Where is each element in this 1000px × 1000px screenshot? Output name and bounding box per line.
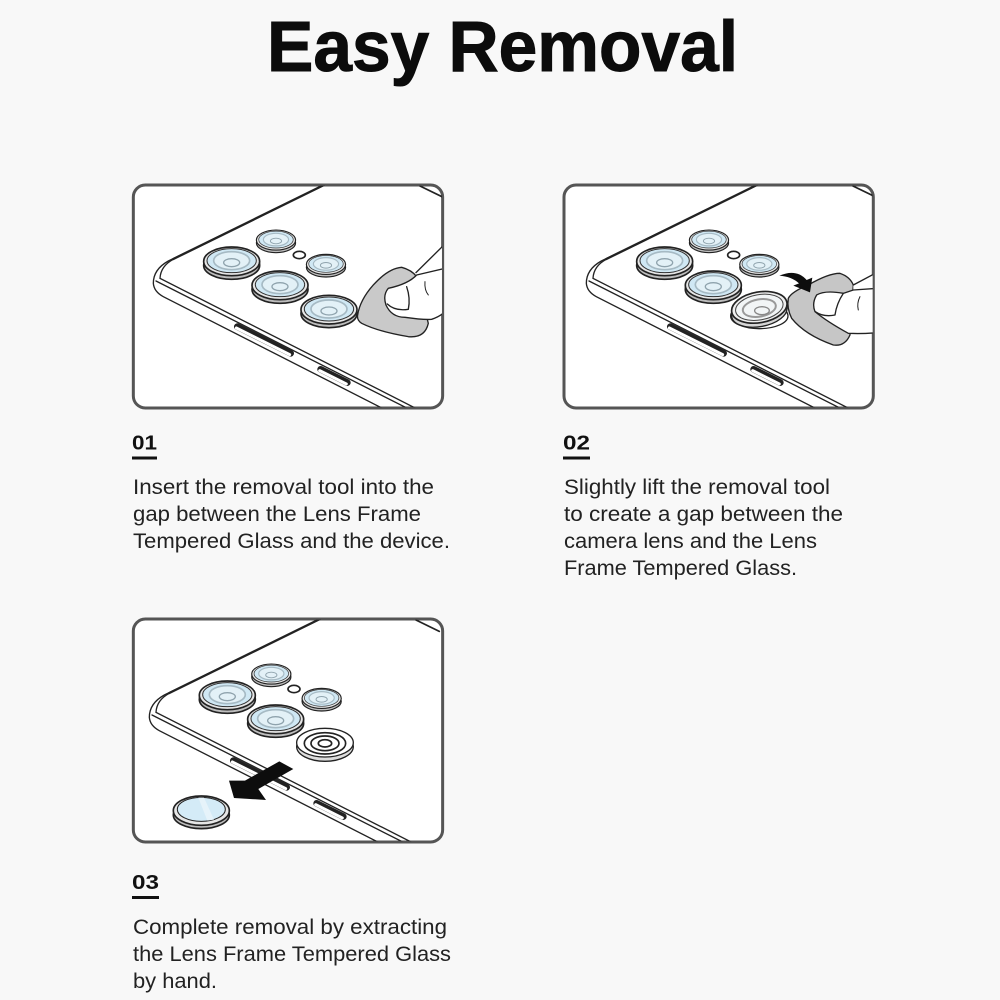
title: Easy Removal <box>267 8 738 87</box>
step 2 text <box>564 475 843 580</box>
step 2 text: to create a gap between the <box>564 502 843 526</box>
step 2 text: Frame Tempered Glass. <box>564 556 797 580</box>
panel: step 3 illustration <box>133 619 443 845</box>
step 3 number <box>132 872 159 899</box>
step 3 text <box>133 915 451 993</box>
step 3 number: 03 <box>132 872 159 894</box>
step 3 text: by hand. <box>133 969 217 993</box>
step 1 text: gap between the Lens Frame <box>133 502 421 526</box>
step 3 text: the Lens Frame Tempered Glass <box>133 942 451 966</box>
step 2 number <box>563 432 590 460</box>
step 1 text: Tempered Glass and the device. <box>133 529 450 553</box>
step 2 number: 02 <box>563 432 590 454</box>
panel: step 2 illustration <box>564 185 877 411</box>
icon: lifted lens <box>730 290 789 330</box>
step 2 text: camera lens and the Lens <box>564 529 817 553</box>
step 1 number: 01 <box>132 432 157 454</box>
arrow: remove direction <box>229 761 293 800</box>
icon: removal tool and hand <box>788 273 877 345</box>
icon: removed lens frame glass <box>173 796 229 829</box>
step 1 text: Insert the removal tool into the <box>133 475 434 499</box>
arrow: lift direction <box>779 273 812 292</box>
step 1 text <box>133 475 450 553</box>
panel: step 1 illustration <box>133 185 445 411</box>
step 3 text: Complete removal by extracting <box>133 915 447 939</box>
step 2 text: Slightly lift the removal tool <box>564 475 830 499</box>
icon: removal tool and hand <box>357 244 445 337</box>
icon: bare camera lens <box>297 728 353 761</box>
